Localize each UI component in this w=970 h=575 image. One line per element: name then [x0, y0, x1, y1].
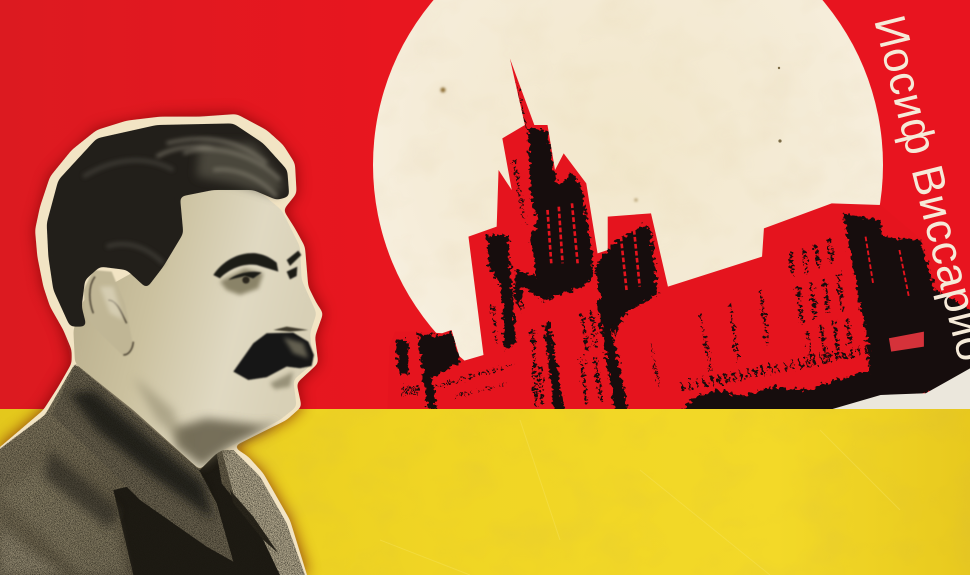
nose shadow [273, 327, 308, 332]
red upper background [0, 0, 970, 410]
shirt and tie [113, 450, 305, 575]
face and neck [73, 187, 317, 469]
yellow lower background [0, 409, 970, 575]
hair [47, 123, 289, 327]
lower lip shadow [270, 372, 293, 389]
ear [83, 270, 133, 356]
building black details [395, 77, 970, 413]
cream cutout border [0, 114, 323, 575]
coat grain [0, 363, 307, 575]
coat lapel [52, 365, 233, 562]
portrait of Stalin [0, 114, 323, 575]
neck shadow [173, 418, 278, 467]
moustache [233, 333, 314, 380]
cream paper circle [373, 0, 883, 360]
eyebrow [213, 251, 301, 278]
coat [0, 363, 308, 575]
white brush smudge [832, 368, 970, 409]
tower red windows [547, 203, 909, 297]
building red mass [388, 58, 970, 409]
building windows [403, 160, 869, 407]
portrait drop shadow [0, 114, 323, 575]
eye [220, 267, 297, 295]
building silhouette [388, 58, 970, 413]
